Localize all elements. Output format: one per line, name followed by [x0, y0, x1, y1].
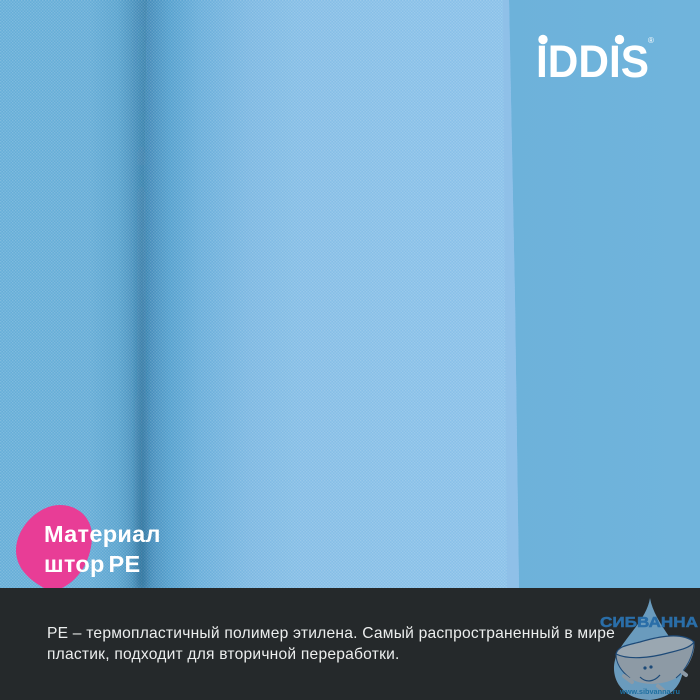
body text: пластик, подходит для вторичной переработки. [47, 646, 400, 662]
bathtub [616, 642, 694, 684]
dark caption panel [0, 588, 700, 700]
brand name: СИБВАННА [600, 614, 698, 631]
pink blob accent [16, 505, 92, 588]
site address: www.sibvanna.ru [619, 689, 680, 696]
body text [47, 625, 615, 662]
watermark: Sibvanna water drop with bathtub [600, 598, 698, 700]
logo: IDDIS: ® [648, 36, 654, 45]
body text: PE – термопластичный полимер этилена. Самый распространенный в мире [47, 625, 615, 642]
heading [44, 521, 161, 577]
heading: штор PE [44, 551, 140, 577]
heading: Материал [44, 521, 161, 547]
water drop [614, 598, 683, 700]
